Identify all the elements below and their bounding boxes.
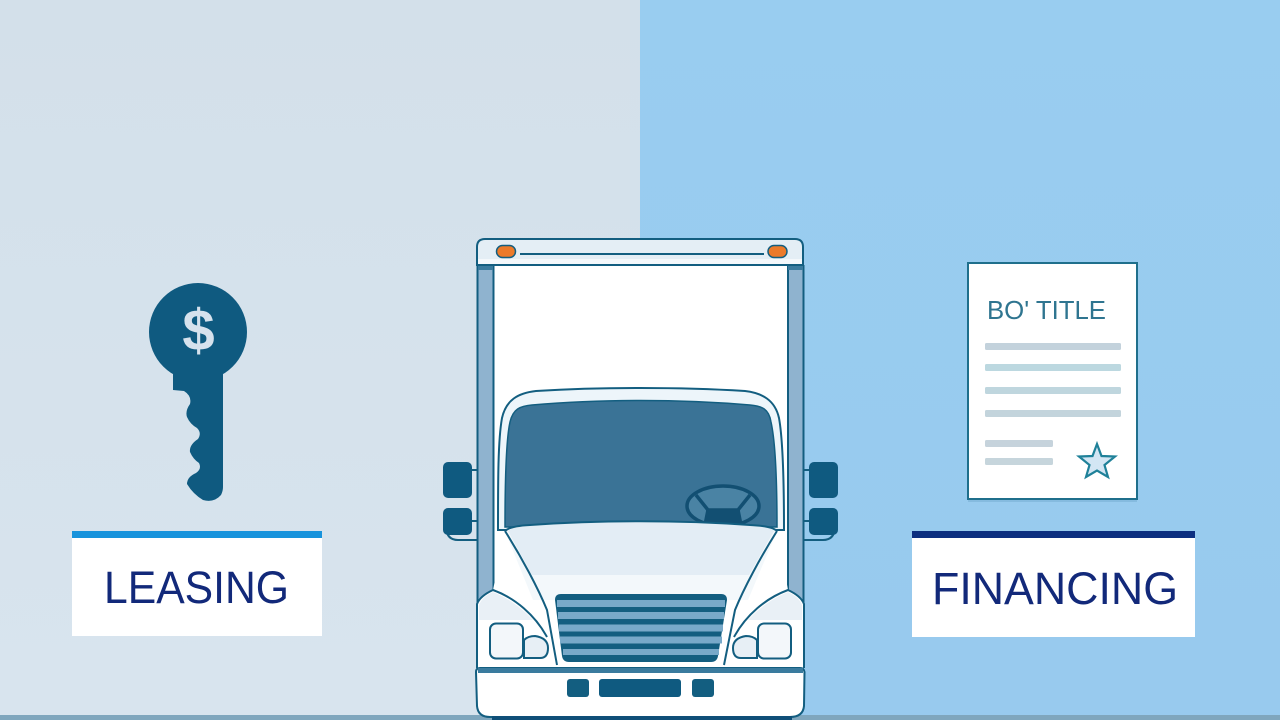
windshield (505, 400, 777, 527)
ground strip (0, 715, 1280, 720)
tire shadow under bumper (492, 716, 792, 720)
icon: star seal (1079, 444, 1115, 477)
right side rail (788, 266, 804, 616)
roof header with marker lights (477, 239, 803, 265)
steering wheel (687, 486, 759, 530)
label: leasing: LEASING (104, 562, 289, 613)
icon: bill of title document: BO' TITLE (987, 295, 1106, 325)
left fender and headlights (477, 590, 552, 668)
hood (505, 521, 777, 665)
panel: leasing background (0, 0, 640, 720)
left side rail (478, 266, 494, 616)
label: leasing (72, 531, 322, 636)
right fender and headlights (729, 590, 804, 668)
label: financing (912, 531, 1195, 637)
bumper (476, 668, 804, 717)
icon: key with dollar sign: $ (182, 298, 215, 363)
label: financing: FINANCING (932, 563, 1178, 614)
cab frame (498, 388, 784, 530)
icon: key with dollar sign (149, 283, 247, 501)
icon: bill of title document (968, 263, 1137, 502)
cargo box (493, 264, 789, 604)
radiator grille (555, 594, 727, 662)
illustration: box truck front view (443, 239, 838, 720)
panel: financing background (640, 0, 1280, 720)
right mirror assembly (784, 462, 838, 540)
left mirror assembly (443, 462, 497, 540)
cab lower body (493, 531, 788, 668)
